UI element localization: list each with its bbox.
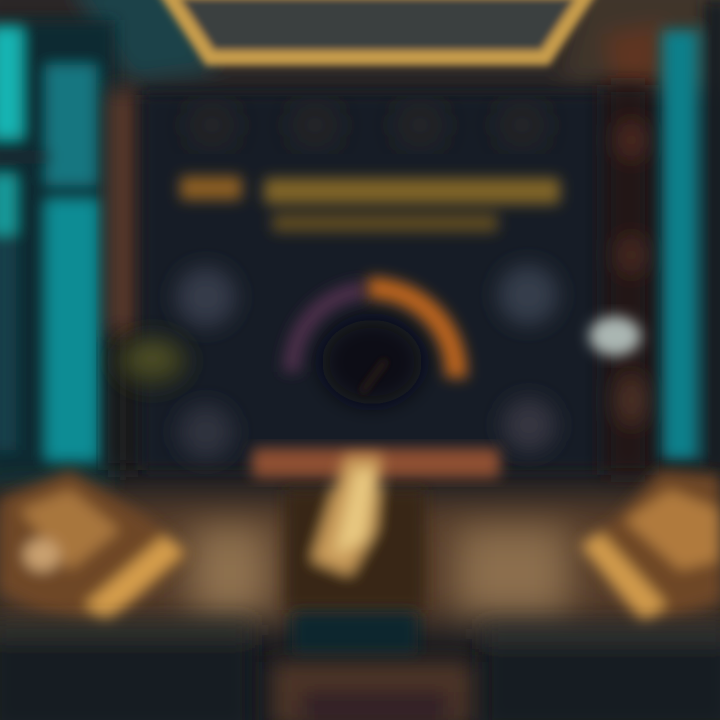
orange bar below board [252,448,500,478]
right bottom seat [482,626,720,720]
green-yellow blob [116,335,188,387]
ceiling [0,0,720,90]
gauge needle [362,360,386,392]
gauge [292,288,456,404]
left gold books [0,470,190,625]
white blob [589,316,641,356]
gauge left arc [292,290,366,372]
center teal seat [292,612,418,656]
top row of faint markers [196,109,538,141]
right gold books [580,470,720,625]
side dials [176,265,558,460]
right teal column [662,0,720,470]
bottom center wood [272,662,472,720]
left brown pillar [108,90,138,470]
left window and teal column [0,20,115,490]
left bottom seat [0,622,252,720]
center gold object [285,455,425,610]
lower wood table [0,495,720,625]
ceiling panel with gold hexagon frame [165,0,590,60]
title text block (blurred, illegible) [180,176,560,232]
gauge dark center [322,320,422,404]
right brown pillar with studs [604,85,652,475]
gauge right arc [368,288,456,378]
central dark board [142,95,604,470]
